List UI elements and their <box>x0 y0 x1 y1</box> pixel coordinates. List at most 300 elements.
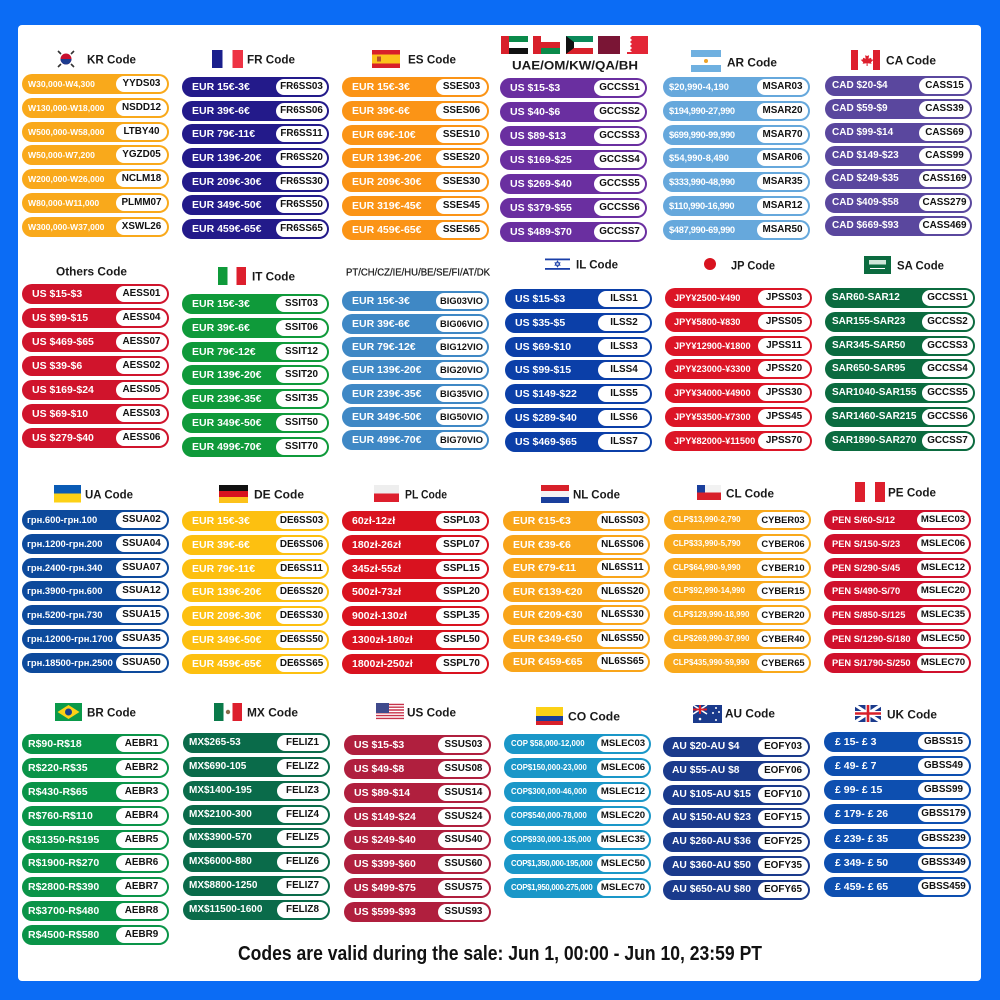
CASS15: CAD $20-$4 <box>832 80 888 91</box>
AESS03: AESS03 <box>123 408 160 419</box>
SSIT03: SSIT03 <box>285 298 318 309</box>
heading: PE flag and title: PE Code <box>888 486 936 500</box>
AESS04: US $99-$15 <box>32 312 88 324</box>
BIG03VIO <box>342 291 489 311</box>
FR6SS50: FR6SS50 <box>280 199 323 210</box>
MSLEC35 <box>504 830 651 850</box>
SSPL20: 500zł-73zł <box>352 586 401 598</box>
GCCSS7: GCCSS7 <box>927 435 968 446</box>
CASS69 <box>825 123 972 143</box>
NL6SS30 <box>503 605 650 625</box>
FELIZ2: FELIZ2 <box>286 761 319 772</box>
BIG50VIO: EUR 349€-50€ <box>352 411 421 423</box>
YYDS03 <box>22 74 169 94</box>
SSIT20 <box>182 365 329 385</box>
SSUS60: SSUS60 <box>445 858 482 869</box>
BIG35VIO: BIG35VIO <box>440 389 483 399</box>
BIG50VIO: BIG50VIO <box>440 412 483 422</box>
SSPL07: 180zł-26zł <box>352 539 401 551</box>
JPSS03: JPSS03 <box>766 292 802 303</box>
CASS39 <box>825 99 972 119</box>
YGZD05 <box>22 145 169 165</box>
FELIZ3 <box>183 781 330 801</box>
CYBER06: CYBER06 <box>761 538 805 549</box>
EOFY06: AU $55-AU $8 <box>672 765 740 776</box>
GCCSS3: SAR345-SAR50 <box>832 340 905 351</box>
GCCSS3: GCCSS3 <box>927 340 968 351</box>
JPSS03: JPY¥2500-¥490 <box>674 293 740 303</box>
FR6SS50: EUR 349€-50€ <box>192 199 261 211</box>
FR6SS03: EUR 15€-3€ <box>192 81 250 93</box>
FR6SS65: EUR 459€-65€ <box>192 223 261 235</box>
CYBER10: CLP$64,990-9,990 <box>673 563 741 572</box>
FELIZ5: MX$3900-570 <box>189 832 252 843</box>
code list: IT <box>182 294 329 457</box>
CYBER06: CLP$33,990-5,790 <box>673 539 741 548</box>
NL6SS50: NL6SS50 <box>601 632 644 644</box>
DE6SS11 <box>182 559 329 579</box>
MSAR06 <box>663 148 810 168</box>
MSAR70 <box>663 125 810 145</box>
GBSS459: £ 459- £ 65 <box>835 881 888 893</box>
code list: AR <box>663 77 810 240</box>
EOFY65 <box>663 880 810 900</box>
GCCSS5 <box>500 174 647 194</box>
SSUA07: SSUA07 <box>122 562 161 573</box>
SSES03: EUR 15€-3€ <box>352 81 410 93</box>
XSWL26 <box>22 217 169 237</box>
CYBER03 <box>664 510 811 530</box>
MSAR50 <box>663 220 810 240</box>
SSES65: SSES65 <box>443 224 480 235</box>
SSES30 <box>342 172 489 192</box>
NL6SS50 <box>503 628 650 648</box>
FELIZ1: FELIZ1 <box>286 737 319 748</box>
SSUS08: SSUS08 <box>445 763 482 774</box>
DE6SS30: EUR 209€-30€ <box>192 610 261 622</box>
MSLEC12 <box>824 558 971 578</box>
heading: CA flag and title <box>851 50 936 70</box>
CASS99: CAD $149-$23 <box>832 150 899 161</box>
SSUS03: US $15-$3 <box>354 739 404 751</box>
SSES03 <box>342 77 489 97</box>
MSLEC06: MSLEC06 <box>601 762 645 773</box>
MSAR50: MSAR50 <box>762 224 803 235</box>
YYDS03: W30,000-W4,300 <box>28 79 95 89</box>
heading: Others title: Others Code <box>56 264 127 278</box>
code list: IL <box>505 289 652 452</box>
SSIT06: SSIT06 <box>285 322 318 333</box>
YGZD05: W50,000-W7,200 <box>28 150 95 160</box>
GCCSS4: SAR650-SAR95 <box>832 363 905 374</box>
SSUA15: SSUA15 <box>122 609 161 620</box>
BIG03VIO: EUR 15€-3€ <box>352 295 410 307</box>
NL6SS65: EUR €459-€65 <box>513 656 582 668</box>
GBSS49 <box>824 756 971 776</box>
ILSS4: US $99-$15 <box>515 364 571 376</box>
heading: country list title: PT/CH/CZ/IE/HU/BE/SE/FI/AT/DK <box>346 268 490 278</box>
NL6SS65 <box>503 652 650 672</box>
SSPL20: SSPL20 <box>443 586 480 597</box>
CASS99 <box>825 146 972 166</box>
SSUS03 <box>344 735 491 755</box>
SSUS24: SSUS24 <box>445 811 482 822</box>
code list: US <box>344 735 491 926</box>
GBSS459 <box>824 877 971 897</box>
JPSS05 <box>665 312 812 332</box>
DE6SS50: DE6SS50 <box>280 634 323 645</box>
panel: CA Code <box>825 50 972 236</box>
NL6SS06 <box>503 534 650 554</box>
BIG12VIO: BIG12VIO <box>440 342 483 352</box>
AEBR3: R$430-R$65 <box>28 786 88 798</box>
AESS06 <box>22 428 169 448</box>
FELIZ6: MX$6000-880 <box>189 856 252 867</box>
MSLEC20: COP$540,000-78,000 <box>511 811 587 820</box>
ILSS1: ILSS1 <box>610 293 638 304</box>
panel: PL Code <box>342 484 489 674</box>
SSIT50: SSIT50 <box>285 417 318 428</box>
SSPL50: SSPL50 <box>443 634 480 645</box>
AEBR7: R$2800-R$390 <box>28 881 99 893</box>
heading: DE flag and title: DE Code <box>254 488 304 502</box>
MSLEC70: MSLEC70 <box>921 657 965 668</box>
BIG06VIO: EUR 39€-6€ <box>352 318 410 330</box>
GBSS179: GBSS179 <box>921 808 966 819</box>
GCCSS2: GCCSS2 <box>599 106 640 117</box>
code list: PL <box>342 511 489 678</box>
SSIT20: SSIT20 <box>285 369 318 380</box>
GCCSS6 <box>500 198 647 218</box>
CYBER65: CYBER65 <box>761 657 805 668</box>
FR6SS06: EUR 39€-6€ <box>192 105 250 117</box>
panel: PT/CH/CZ/IE/HU/BE/SE/FI/AT/DK Code <box>342 268 490 450</box>
GBSS459: GBSS459 <box>921 881 966 892</box>
SSIT50: EUR 349€-50€ <box>192 417 261 429</box>
PLMM07: W80,000-W11,000 <box>28 198 99 208</box>
FELIZ7: FELIZ7 <box>286 880 319 891</box>
heading: IT flag and title: IT Code <box>252 270 295 284</box>
JPSS45: JPSS45 <box>766 411 802 422</box>
GCCSS7: SAR1890-SAR270 <box>832 435 916 446</box>
SSUS03: SSUS03 <box>445 739 482 750</box>
SSUA04 <box>22 534 169 554</box>
YYDS03: YYDS03 <box>123 78 160 89</box>
GCCSS7: US $489-$70 <box>510 226 572 238</box>
panel: Others Code <box>22 264 169 448</box>
SSPL03: SSPL03 <box>443 515 480 526</box>
CYBER03: CLP$13,990-2,790 <box>673 515 741 524</box>
EOFY15 <box>663 808 810 828</box>
SSES06: EUR 39€-6€ <box>352 105 410 117</box>
NL6SS65: NL6SS65 <box>601 656 644 667</box>
FR6SS20: EUR 139€-20€ <box>192 152 261 164</box>
GCCSS5: SAR1040-SAR155 <box>832 387 916 398</box>
GCCSS1: GCCSS1 <box>927 292 968 303</box>
MSLEC06: PEN S/150-S/23 <box>832 539 900 549</box>
MSAR50: $487,990-69,990 <box>669 225 735 235</box>
heading: SA flag and title <box>864 256 944 274</box>
CASS39: CASS39 <box>925 103 964 114</box>
EOFY35: AU $360-AU $50 <box>672 860 751 871</box>
DE6SS65: EUR 459€-65€ <box>192 658 261 670</box>
MSLEC12: MSLEC12 <box>601 786 645 797</box>
JPSS20: JPSS20 <box>766 363 802 374</box>
MSAR03 <box>663 77 810 97</box>
CASS15: CASS15 <box>925 80 964 91</box>
AEBR8: AEBR8 <box>125 905 158 916</box>
SSUS08: US $49-$8 <box>354 763 404 775</box>
CASS169: CASS169 <box>923 173 966 184</box>
DE6SS20: EUR 139€-20€ <box>192 586 261 598</box>
heading: ES flag and title: ES Code <box>408 52 456 66</box>
LTBY40: W500,000-W58,000 <box>28 127 104 137</box>
code list: NL <box>503 511 650 676</box>
heading: UA flag and title <box>54 485 133 502</box>
AESS03 <box>22 404 169 424</box>
AEBR6 <box>22 853 169 873</box>
FR6SS06 <box>182 101 329 121</box>
heading: five gulf flags and title <box>501 36 648 72</box>
MSAR70: MSAR70 <box>762 129 803 140</box>
SSIT03 <box>182 294 329 314</box>
SSUS60: US $399-$60 <box>354 858 416 870</box>
DE6SS03: DE6SS03 <box>280 515 323 526</box>
SSUA15: грн.5200-грн.730 <box>27 609 102 620</box>
code list: MX <box>183 733 330 924</box>
GBSS349: GBSS349 <box>921 857 966 868</box>
AEBR4 <box>22 806 169 826</box>
MSLEC06: COP$150,000-23,000 <box>511 763 587 772</box>
DE6SS03: EUR 15€-3€ <box>192 515 250 527</box>
EOFY25: AU $260-AU $36 <box>672 836 751 847</box>
heading: IT flag and title <box>218 267 295 285</box>
CYBER15: CYBER15 <box>761 585 805 596</box>
panel: DE Code <box>182 485 329 674</box>
heading: IL flag and title: IL Code <box>576 258 618 272</box>
SSPL50: 1300zł-180zł <box>352 634 413 646</box>
GBSS179 <box>824 804 971 824</box>
SSUS14 <box>344 783 491 803</box>
SSIT06: EUR 39€-6€ <box>192 322 250 334</box>
AESS05: AESS05 <box>123 384 160 395</box>
panel: MX Code <box>183 701 330 920</box>
ILSS5: US $149-$22 <box>515 388 577 400</box>
FR6SS03: FR6SS03 <box>280 81 323 92</box>
MSAR35: MSAR35 <box>762 176 803 187</box>
NL6SS20: EUR €139-€20 <box>513 586 582 598</box>
heading: AR flag and title <box>691 50 777 72</box>
NL6SS03: EUR €15-€3 <box>513 515 571 527</box>
BIG12VIO: EUR 79€-12€ <box>352 341 416 353</box>
SSES10 <box>342 125 489 145</box>
JPSS70: JPY¥82000-¥11500 <box>674 436 755 446</box>
JPSS11: JPY¥12900-¥1800 <box>674 341 751 351</box>
NL6SS03 <box>503 511 650 531</box>
SSUS08 <box>344 759 491 779</box>
FELIZ4: FELIZ4 <box>286 809 319 820</box>
AESS05: US $169-$24 <box>32 384 94 396</box>
MSAR03: $20,990-4,190 <box>669 82 729 92</box>
heading: JP flag and title <box>704 258 775 272</box>
BIG06VIO: BIG06VIO <box>440 319 483 329</box>
NL6SS11: EUR €79-€11 <box>513 562 576 574</box>
SSIT70: SSIT70 <box>285 441 318 452</box>
NL6SS11: NL6SS11 <box>601 562 644 573</box>
SSUA35: SSUA35 <box>122 633 161 644</box>
MSLEC70: PEN S/1790-S/250 <box>832 658 911 668</box>
GCCSS1 <box>500 78 647 98</box>
GBSS15 <box>824 732 971 752</box>
JPSS05: JPSS05 <box>766 316 802 327</box>
XSWL26: XSWL26 <box>122 221 161 232</box>
DE6SS06: EUR 39€-6€ <box>192 539 250 551</box>
SSIT70: EUR 499€-70€ <box>192 441 261 453</box>
SSPL07 <box>342 535 489 555</box>
EOFY03: AU $20-AU $4 <box>672 741 740 752</box>
GCCSS2 <box>825 312 975 332</box>
GBSS239 <box>824 829 971 849</box>
AEBR1 <box>22 734 169 754</box>
FELIZ4 <box>183 805 330 825</box>
heading: CA flag and title: CA Code <box>886 54 936 68</box>
FELIZ7 <box>183 876 330 896</box>
CYBER10: CYBER10 <box>761 562 805 573</box>
ILSS7: US $469-$65 <box>515 436 577 448</box>
AEBR2 <box>22 758 169 778</box>
code list: UK <box>824 732 971 901</box>
SSPL15: SSPL15 <box>443 563 480 574</box>
heading: PL flag and title: PL Code <box>405 488 447 502</box>
FR6SS20: FR6SS20 <box>280 152 323 163</box>
GBSS239: GBSS239 <box>921 833 966 844</box>
GCCSS4: US $169-$25 <box>510 154 572 166</box>
DE6SS50 <box>182 630 329 650</box>
CASS69: CAD $99-$14 <box>832 127 893 138</box>
FR6SS03 <box>182 77 329 97</box>
code list: KR <box>22 74 169 237</box>
ILSS2: US $35-$5 <box>515 317 565 329</box>
SSUS14: US $89-$14 <box>354 787 410 799</box>
SSUS60 <box>344 854 491 874</box>
BIG35VIO: EUR 239€-35€ <box>352 388 421 400</box>
CASS99: CASS99 <box>925 150 964 161</box>
FELIZ1: MX$265-53 <box>189 737 241 748</box>
SSPL15: 345zł-55zł <box>352 563 401 575</box>
SSUS75 <box>344 878 491 898</box>
panel: NL Code <box>503 484 650 672</box>
AESS06: US $279-$40 <box>32 432 94 444</box>
heading: PL flag and title <box>342 484 489 511</box>
GCCSS3 <box>825 336 975 356</box>
SSUA50 <box>22 653 169 673</box>
GCCSS2: SAR155-SAR23 <box>832 316 905 327</box>
heading: UA flag and title: UA Code <box>85 488 133 502</box>
FR6SS50 <box>182 195 329 215</box>
DE6SS06: DE6SS06 <box>280 539 323 550</box>
MSAR35 <box>663 172 810 192</box>
JPSS20: JPY¥23000-¥3300 <box>674 364 751 374</box>
NL6SS20: NL6SS20 <box>601 586 644 596</box>
SSPL35 <box>342 606 489 626</box>
CASS15 <box>825 76 972 96</box>
MSLEC03: MSLEC03 <box>921 514 965 525</box>
ILSS3 <box>505 337 652 357</box>
GCCSS6 <box>825 407 975 427</box>
GCCSS2 <box>500 102 647 122</box>
JPSS70 <box>665 431 812 451</box>
JPSS30 <box>665 383 812 403</box>
SSIT35: SSIT35 <box>285 393 318 404</box>
FELIZ6: FELIZ6 <box>286 856 319 867</box>
EOFY10: AU $105-AU $15 <box>672 789 751 800</box>
heading: AU flag and title <box>663 703 810 737</box>
MSLEC20: MSLEC20 <box>921 585 965 596</box>
SSES03: SSES03 <box>443 81 480 92</box>
heading: MX flag and title: MX Code <box>247 706 298 720</box>
heading: FR flag and title <box>212 50 295 68</box>
heading: AU flag and title: AU Code <box>725 706 775 720</box>
CASS169 <box>825 169 972 189</box>
AESS02: AESS02 <box>123 360 160 371</box>
SSES06: SSES06 <box>443 105 480 116</box>
heading: KR flag and title <box>58 50 136 68</box>
ILSS6 <box>505 408 652 428</box>
MSLEC06 <box>824 534 971 554</box>
MSAR12: $110,990-16,990 <box>669 201 734 211</box>
MSLEC06: MSLEC06 <box>921 538 965 549</box>
SSES30: SSES30 <box>443 176 480 187</box>
LTBY40 <box>22 122 169 142</box>
code list: CO <box>504 734 651 902</box>
heading: FR flag and title: FR Code <box>247 52 295 66</box>
SSES20 <box>342 148 489 168</box>
code list: UA <box>22 510 169 673</box>
NL6SS03: NL6SS03 <box>601 515 644 526</box>
SSES20: SSES20 <box>443 152 480 163</box>
DE6SS11: DE6SS11 <box>280 563 323 574</box>
GBSS349: £ 349- £ 50 <box>835 857 888 869</box>
NCLM18 <box>22 169 169 189</box>
SSPL07: SSPL07 <box>443 539 480 550</box>
FELIZ5 <box>183 828 330 848</box>
AEBR3 <box>22 782 169 802</box>
NSDD12: W130,000-W18,000 <box>28 103 104 113</box>
GCCSS4 <box>825 359 975 379</box>
SSUA04: SSUA04 <box>122 538 161 549</box>
FELIZ4: MX$2100-300 <box>189 809 252 820</box>
heading: five gulf flags and title: UAE/OM/KW/QA/BH <box>512 58 638 72</box>
MSLEC12: COP$300,000-46,000 <box>511 787 587 796</box>
AEBR7: AEBR7 <box>125 881 158 892</box>
CYBER20: CLP$129,990-18,990 <box>673 610 750 619</box>
SSES10: SSES10 <box>443 129 480 140</box>
panel: US Code <box>344 701 491 922</box>
SSIT50 <box>182 413 329 433</box>
MSLEC03: MSLEC03 <box>601 738 645 749</box>
heading: SA flag and title: SA Code <box>897 258 944 272</box>
SSIT20: EUR 139€-20€ <box>192 369 261 381</box>
ILSS3: ILSS3 <box>610 341 638 352</box>
SSPL03: 60zł-12zł <box>352 515 395 527</box>
SSPL15 <box>342 559 489 579</box>
SSES06 <box>342 101 489 121</box>
MSAR12: MSAR12 <box>762 200 803 211</box>
EOFY25: EOFY25 <box>764 836 802 847</box>
DE6SS20: DE6SS20 <box>280 586 323 597</box>
footer note: Codes are valid during the sale: Jun 1, 00:00 - Jun 10, 23:59 PT <box>238 943 762 965</box>
MSLEC35: PEN S/850-S/125 <box>832 610 905 620</box>
